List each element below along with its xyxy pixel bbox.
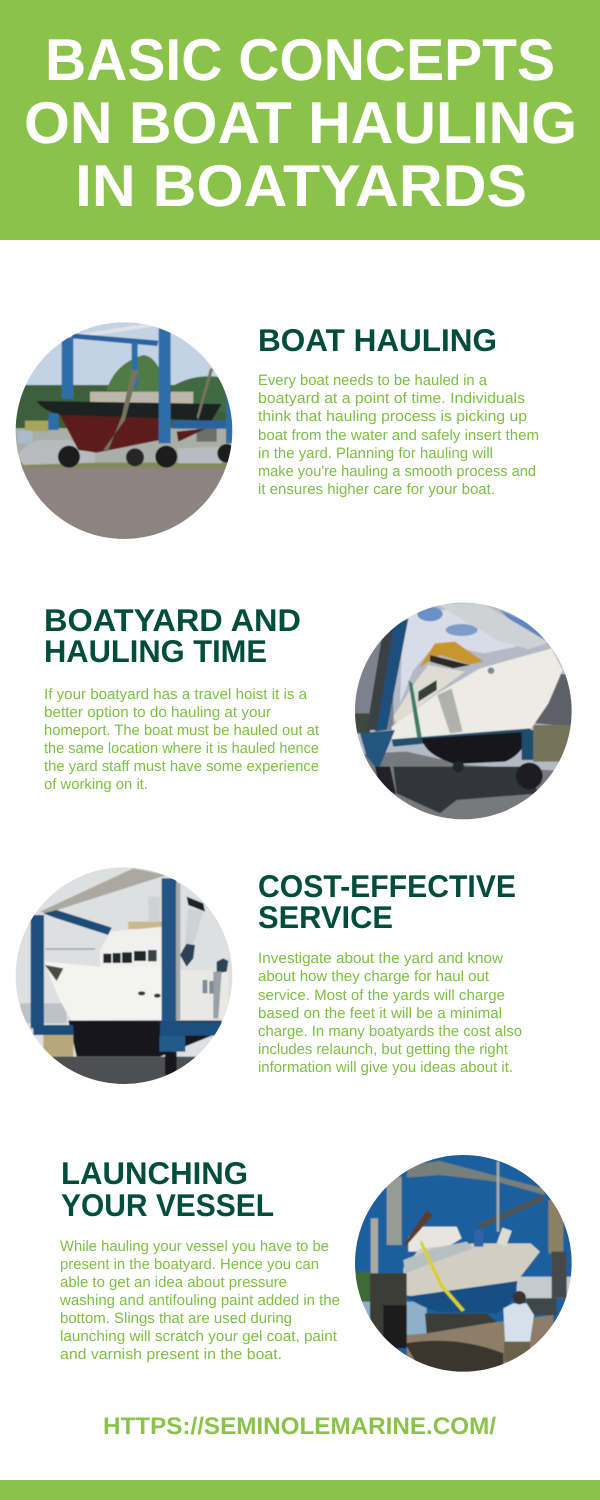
photo: blue-hulled boat in slings under deep blue sky bbox=[353, 1153, 573, 1378]
photo: white motor yacht on lift under cloudy sky bbox=[353, 600, 573, 823]
title: IN BOATYARDS bbox=[75, 153, 527, 219]
body: cost-effective service: based on the feet it will be a minimal bbox=[258, 1005, 502, 1022]
heading: launching your vessel: LAUNCHING bbox=[61, 1155, 248, 1191]
website link: HTTPS://SEMINOLEMARINE.COM/ bbox=[103, 1413, 496, 1440]
body: launching your vessel: While hauling your vessel you have to be bbox=[60, 1238, 329, 1255]
title bbox=[24, 27, 577, 219]
heading: launching your vessel: YOUR VESSEL bbox=[61, 1187, 274, 1223]
bottom banner bbox=[0, 1480, 600, 1500]
body: boat hauling: think that hauling process is picking up bbox=[258, 408, 527, 425]
body: boatyard and hauling time: If your boatyard has a travel hoist it is a bbox=[44, 686, 308, 703]
body: cost-effective service: about how they charge for haul out bbox=[258, 968, 490, 985]
heading: launching your vessel bbox=[61, 1155, 274, 1223]
body: boat hauling: Every boat needs to be hauled in a bbox=[258, 372, 488, 389]
title: ON BOAT HAULING bbox=[24, 90, 577, 156]
heading: cost-effective service: SERVICE bbox=[258, 899, 393, 935]
photo: white trawler yacht in blue lift bbox=[13, 865, 237, 1088]
title: BASIC CONCEPTS bbox=[45, 27, 555, 93]
photo: blue travel lift with dark-hulled sailboat bbox=[13, 320, 237, 543]
body: launching your vessel: washing and antifouling paint added in the bbox=[59, 1292, 340, 1309]
heading: boatyard and hauling time: HAULING TIME bbox=[44, 633, 267, 669]
heading: cost-effective service bbox=[258, 868, 516, 935]
body: cost-effective service: Investigate about the yard and know bbox=[258, 950, 503, 967]
body: boat hauling: make you're hauling a smooth process and bbox=[258, 463, 536, 480]
body: boatyard and hauling time: homeport. The boat must be hauled out at bbox=[44, 722, 320, 739]
body: launching your vessel: launching will scratch your gel coat, paint bbox=[60, 1328, 338, 1345]
body: cost-effective service: service. Most of the yards will charge bbox=[258, 987, 505, 1004]
body: launching your vessel bbox=[59, 1238, 340, 1363]
body: cost-effective service bbox=[258, 950, 522, 1076]
body: boatyard and hauling time: of working on it. bbox=[44, 776, 148, 793]
heading: cost-effective service: COST-EFFECTIVE bbox=[258, 868, 516, 904]
body: boatyard and hauling time: better option to do hauling at your bbox=[44, 704, 271, 721]
body: boatyard and hauling time: the yard staff must have some experience bbox=[44, 758, 319, 775]
heading: boatyard and hauling time bbox=[44, 602, 301, 669]
body: launching your vessel: able to get an idea about pressure bbox=[60, 1274, 287, 1291]
body: boatyard and hauling time bbox=[44, 686, 320, 793]
heading: boatyard and hauling time: BOATYARD AND bbox=[44, 602, 301, 638]
heading: boat hauling: BOAT HAULING bbox=[258, 322, 497, 358]
body: launching your vessel: and varnish present in the boat. bbox=[60, 1346, 282, 1363]
body: boat hauling: boat from the water and safely insert them bbox=[258, 427, 539, 444]
body: boatyard and hauling time: the same location where it is hauled hence bbox=[44, 740, 319, 757]
body: boat hauling: boatyard at a point of time. Individuals bbox=[258, 390, 525, 407]
body: boat hauling: it ensures higher care for your boat. bbox=[258, 481, 495, 498]
body: cost-effective service: charge. In many boatyards the cost also bbox=[258, 1023, 522, 1040]
body: launching your vessel: present in the boatyard. Hence you can bbox=[60, 1256, 319, 1273]
body: cost-effective service: information will give you ideas about it. bbox=[258, 1059, 513, 1076]
body: boat hauling bbox=[258, 372, 539, 498]
top banner bbox=[0, 0, 600, 240]
body: cost-effective service: includes relaunch, but getting the right bbox=[258, 1041, 509, 1058]
body: launching your vessel: bottom. Slings that are used during bbox=[60, 1310, 292, 1327]
body: boat hauling: in the yard. Planning for hauling will bbox=[258, 445, 493, 462]
